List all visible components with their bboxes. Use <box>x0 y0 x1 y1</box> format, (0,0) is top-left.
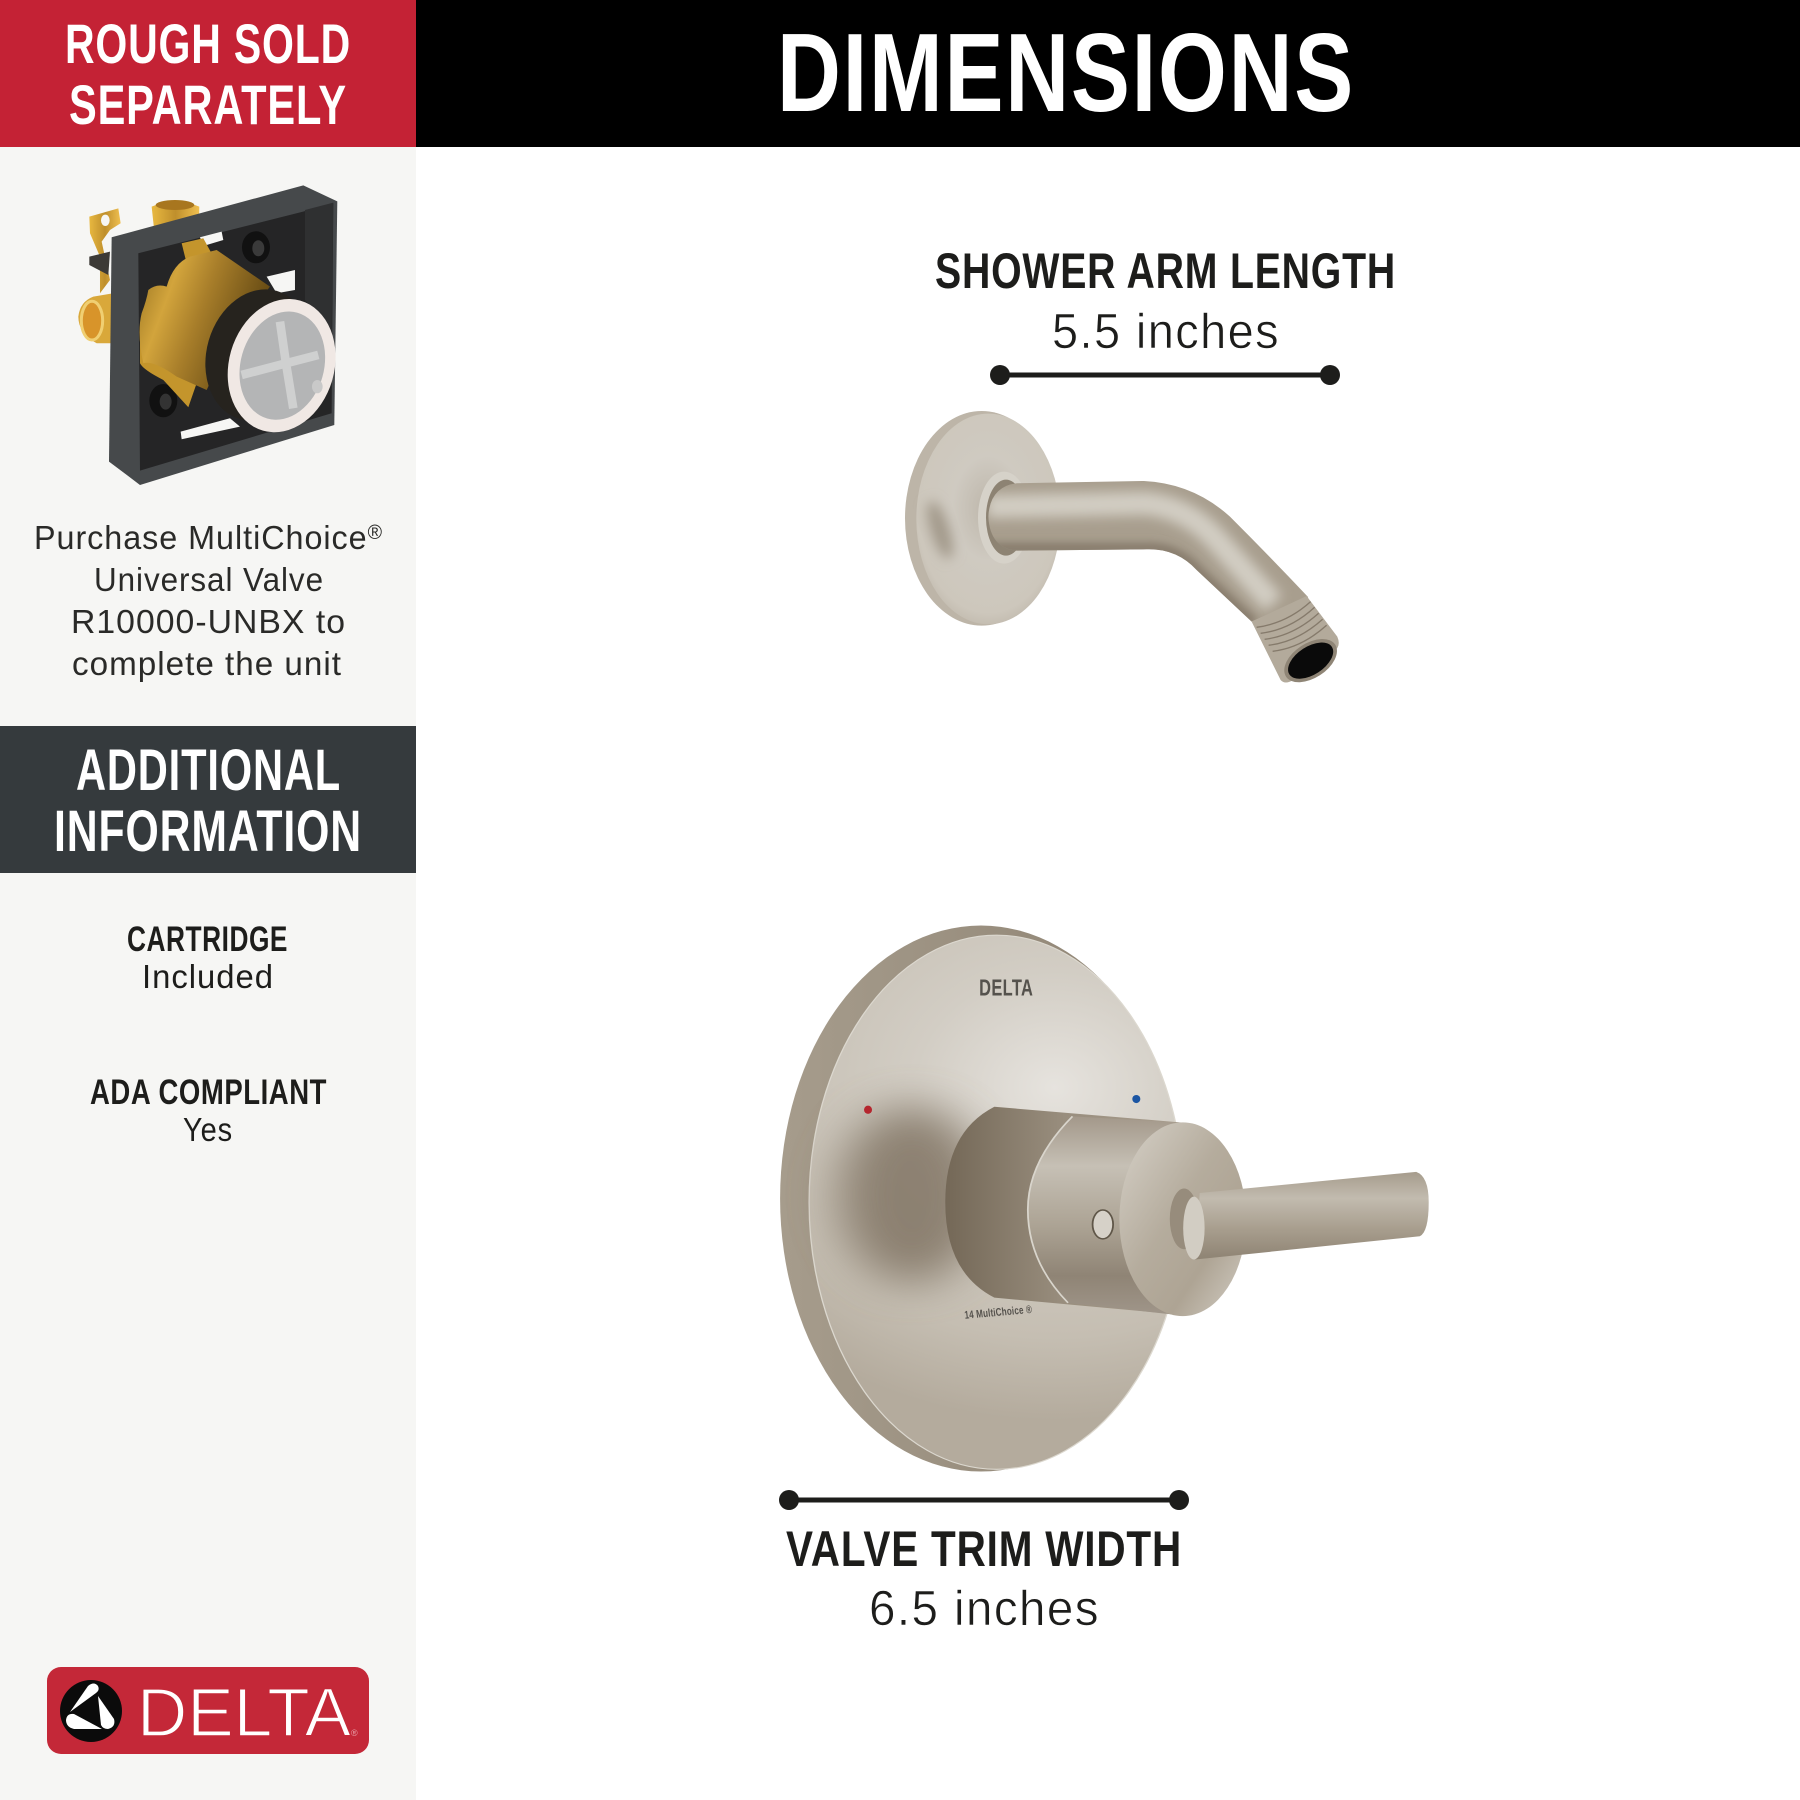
info: cartridge: Included <box>142 958 274 995</box>
arm: thread <box>1252 596 1339 682</box>
info: ada compliant: Yes <box>183 1111 233 1148</box>
arm: pipe <box>988 481 1308 622</box>
text: purchase note: R10000-UNBX to <box>71 603 346 640</box>
label: valve trim width: 6.5 inches <box>869 1582 1100 1636</box>
trim: knob face <box>1119 1122 1246 1316</box>
image: rough-in valve <box>78 185 351 485</box>
banner: dimensions title: DIMENSIONS <box>777 11 1355 135</box>
logo: delta: DELTA <box>137 1674 351 1751</box>
trim: disc face <box>809 935 1184 1469</box>
info: ada compliant: ADA COMPLIANT <box>90 1073 327 1112</box>
trim: shadow <box>838 1106 985 1284</box>
logo: delta <box>47 1667 369 1754</box>
valve: gray plug <box>227 301 338 430</box>
valve: brass top pipe neck <box>182 238 213 263</box>
trim: hot dot <box>864 1106 872 1114</box>
text: purchase note: Universal Valve <box>94 561 324 598</box>
logo: delta: ® <box>351 1728 358 1738</box>
valve: silver ring <box>212 286 351 445</box>
trim: knob button <box>1093 1210 1113 1239</box>
info: cartridge <box>127 920 288 995</box>
trim: lever <box>1195 1172 1429 1260</box>
banner: additional information <box>0 726 416 873</box>
valve: left pipe <box>78 293 113 343</box>
valve: brass body <box>140 250 270 390</box>
trim: lever end <box>1183 1197 1205 1260</box>
arm: opening <box>1277 630 1345 691</box>
panel: sidebar <box>0 0 416 1800</box>
trim: cold dot <box>1132 1095 1140 1103</box>
label: valve trim width <box>786 1521 1182 1636</box>
valve: black frame <box>109 185 337 485</box>
trim: knob cylinder <box>1028 1116 1184 1316</box>
valve: brass tab <box>89 208 121 293</box>
label: shower arm length <box>935 243 1396 359</box>
valve: top pipe <box>152 202 199 253</box>
trim: base cylinder <box>945 1107 1184 1315</box>
valve: screws <box>242 231 270 263</box>
text: purchase note: complete the unit <box>72 645 342 682</box>
banner: rough sold separately <box>0 0 416 147</box>
banner: additional information: INFORMATION <box>54 799 362 864</box>
text: purchase note <box>34 519 383 682</box>
label: shower arm length: 5.5 inches <box>1052 305 1280 359</box>
trim: lever collar <box>1170 1189 1198 1249</box>
trim: logo text: DELTA <box>979 976 1033 1001</box>
trim: small print: 14 MultiChoice ® <box>964 1303 1033 1321</box>
arm: flange <box>905 411 1058 626</box>
dimension line: shower arm <box>990 365 1340 385</box>
label: shower arm length: SHOWER ARM LENGTH <box>935 243 1396 299</box>
arm: collar <box>978 472 1030 564</box>
banner: rough sold separately: ROUGH SOLD <box>65 12 351 75</box>
label: valve trim width: VALVE TRIM WIDTH <box>786 1521 1182 1577</box>
banner: additional information: ADDITIONAL <box>76 738 341 803</box>
banner: dimensions title <box>416 0 1800 147</box>
text: purchase note: Purchase MultiChoice <box>34 519 375 556</box>
image: shower arm <box>905 411 1345 691</box>
valve: lower brass pipe <box>140 340 197 407</box>
info: ada compliant <box>90 1073 327 1148</box>
trim: disc edge <box>780 926 1182 1472</box>
info: cartridge: CARTRIDGE <box>127 920 288 959</box>
banner: rough sold separately: SEPARATELY <box>69 73 347 136</box>
image: valve trim <box>780 926 1429 1472</box>
valve: dark sleeve <box>190 277 326 433</box>
text: purchase note: ® <box>368 522 383 544</box>
dimension line: valve trim <box>779 1490 1189 1510</box>
